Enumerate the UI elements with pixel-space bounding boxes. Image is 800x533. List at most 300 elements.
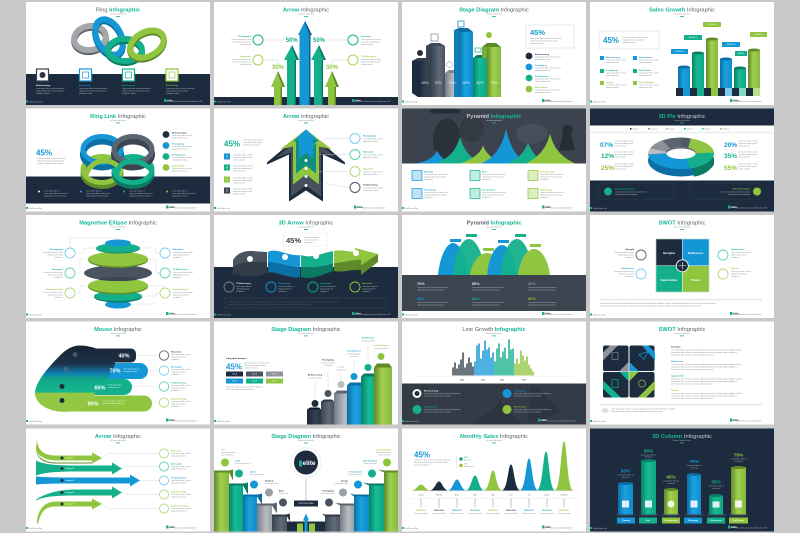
captions: adipiscing elit sed do <box>171 496 186 498</box>
percent labels: 40% <box>118 354 130 360</box>
right icon list: adipiscing elit sed do <box>363 189 378 192</box>
footer: elite <box>733 98 739 102</box>
right icon list: Photography <box>363 134 377 138</box>
subtitle: Insert your subtitle here <box>298 226 314 228</box>
subtitle: Strategic Data For Success <box>673 439 691 442</box>
captions: TV Advertising <box>171 476 186 480</box>
captions: Newspaper <box>52 268 63 271</box>
lettered list: C <box>226 178 229 182</box>
panel items: Lorem ipsum dolor sit amet consectetur adipiscing <box>424 392 461 395</box>
legend list: End Product <box>172 164 185 168</box>
stat notes: Lorem ipsum dolor sit amet <box>614 162 634 166</box>
slide: Ring Link Infographic <box>26 108 210 212</box>
slide: Ring Infographic <box>26 2 210 105</box>
note box <box>224 298 386 308</box>
slide: Magnetic Ellipse Infographic <box>26 215 210 318</box>
navy panel <box>26 74 210 105</box>
cylinder columns <box>616 459 748 516</box>
subtitle: Insert your subtitle here <box>674 12 690 16</box>
column notes: Lorem ipsum dolor sit <box>618 474 634 476</box>
subtitle: Insert your subtitle here <box>110 439 126 442</box>
lettered list: sed do eiusmod <box>233 170 245 172</box>
right icon list: Newspaper <box>363 150 374 154</box>
title: Stage Diagram Infographic <box>271 434 341 440</box>
analysis intro <box>226 357 270 372</box>
captions: Education <box>173 248 184 251</box>
month labels: September <box>560 494 568 496</box>
gender split: 30% <box>464 464 468 466</box>
legend list: Lorem ipsum dolor sit amet consect <box>535 56 561 58</box>
slide: Mouse Infographic <box>26 322 210 424</box>
stage icons and stems <box>312 346 384 407</box>
footer <box>402 418 577 423</box>
big percent: adipiscing elit sed do eiusmod tempor <box>37 160 65 162</box>
title: Mouse Infographic <box>94 327 142 333</box>
subtitle: Insert your subtitle here <box>110 119 126 122</box>
feature list: adipiscing elit sed <box>639 61 652 64</box>
captions: adipiscing elit sed do <box>173 274 188 276</box>
percent intro <box>414 450 451 466</box>
month labels: May <box>492 494 495 496</box>
percent stats: 55% <box>724 165 737 172</box>
captions: Lorem ipsum dolor sit amet <box>171 493 191 496</box>
amount notes: Lorem ipsum dolor <box>450 512 464 515</box>
SWOT text blocks: Lorem ipsum dolor sit amet consectetur adipiscing elit sed <box>671 354 713 356</box>
bottom note: Lorem ipsum dolor sit amet consectetur adipiscing elit sed do eiusmod tempor incididunt ut labore et dolore magna aliqua ut enim ad minim <box>600 304 702 308</box>
title: 3D Pie Infographic <box>658 114 706 120</box>
footer <box>402 205 574 210</box>
month labels <box>418 494 568 496</box>
column notes: Lorem ipsum dolor sit <box>686 464 702 467</box>
stat notes: Lorem ipsum dolor sit amet <box>738 150 758 154</box>
stage captions: Lorem ipsum dolor <box>320 492 334 495</box>
footer: Elite Business Plan <box>593 314 606 316</box>
stat notes: consectetur adipiscing elit <box>738 153 757 156</box>
year labels <box>460 378 526 382</box>
bottom notes <box>38 190 196 198</box>
legend list: adipiscing elit sed do <box>535 58 550 61</box>
stage captions: Lorem ipsum dolor <box>265 482 279 485</box>
stage captions: amet consectetur <box>221 454 234 456</box>
value tags: $199,000.00 <box>708 24 716 26</box>
captions: Audio Production <box>171 504 189 508</box>
feature list <box>600 56 659 89</box>
big percent <box>36 148 66 165</box>
process descriptions: adipiscing elit sed do eiusmod tempor <box>79 90 107 92</box>
percent stats <box>600 142 737 172</box>
value tags <box>671 22 767 56</box>
logo badge <box>291 448 321 478</box>
analysis callouts: adipiscing elit sed do eiusmod <box>728 193 750 196</box>
process descriptions: incididunt ut labore <box>122 92 136 95</box>
stage captions: Lorem ipsum dolor <box>321 362 335 364</box>
percent labels: 70% <box>689 459 700 465</box>
lettered list: consectetur adipiscing elit <box>233 179 252 182</box>
feature grid: Lorem ipsum dolor sit amet cons <box>424 191 448 194</box>
footer: elite <box>167 98 173 102</box>
feature grid: incididunt ut <box>482 178 491 181</box>
footer: elite <box>545 205 551 209</box>
percent stats: 35% <box>724 153 737 160</box>
SWOT matrix <box>656 239 709 292</box>
captions: Graphic Design <box>171 490 187 494</box>
captions: adipiscing elit sed do <box>48 274 63 276</box>
bottom notes: Lorem ipsum dolor sit amet cons <box>129 192 153 195</box>
column name buttons: Prototyping <box>688 519 698 522</box>
captions <box>171 350 191 408</box>
stat notes: consectetur adipiscing elit <box>614 142 633 145</box>
feature grid: Prototyping <box>424 188 436 192</box>
percent intro: 45% <box>414 450 430 460</box>
captions: Lorem ipsum dolor sit amet <box>171 479 191 482</box>
value tags <box>450 234 541 251</box>
legend list: Brainstorming <box>535 53 550 56</box>
title: Ring Infographic <box>96 8 140 14</box>
captions: TV Advertising <box>173 268 188 271</box>
stat notes: sed do eiusmod <box>738 168 750 170</box>
category captions: incididunt ut <box>236 290 245 293</box>
panel items <box>412 389 551 414</box>
footer: elite <box>731 525 737 529</box>
bottom notes: Lorem ipsum dolor sit amet cons <box>86 192 110 195</box>
subtitle: Insert your subtitle here <box>110 12 126 16</box>
lettered list: Lorem ipsum dolor sit amet <box>233 164 253 168</box>
SWOT text blocks: Weaknesses <box>671 361 684 363</box>
stat notes: sed do eiusmod <box>738 156 750 158</box>
footer: Elite Business Plan <box>593 100 606 104</box>
big percent: incididunt ut labore et dolore magna <box>37 162 63 165</box>
SWOT text blocks: Lorem ipsum dolor sit amet consectetur adipiscing elit sed <box>671 397 713 400</box>
SWOT text blocks: Lorem ipsum dolor sit amet consectetur adipiscing elit sed do eiusmod tempor incididunt ut <box>671 394 737 398</box>
footer: elite <box>733 418 739 422</box>
SWOT text blocks: Opportunities <box>671 374 685 378</box>
feature grid: Brief <box>482 170 487 174</box>
captions: incididunt ut <box>173 256 182 259</box>
legend strip <box>590 128 774 134</box>
side captions: Threats <box>731 267 739 270</box>
right icon list: TV Advertising <box>363 184 378 186</box>
interlocked rings <box>72 15 169 65</box>
callout 45%: Lorem ipsum dolor sit <box>304 236 320 239</box>
icon circles <box>253 35 358 65</box>
stage captions: Sprint <box>250 470 256 474</box>
note box: Lorem ipsum dolor sit amet consectetur adipiscing elit sed do eiusmod tempor incididunt ut labore et dolore magna <box>228 303 311 306</box>
amount notes: Lorem ipsum dolor <box>486 512 500 515</box>
footer: www.elite.com | contact@elite.com <box>738 313 762 316</box>
panel items: elit sed do eiusmod tempor incididunt <box>424 410 452 414</box>
feature grid: Planning <box>424 172 434 174</box>
stage captions: Test <box>221 448 225 452</box>
lettered list: B <box>226 166 228 170</box>
category chips: Category 04 <box>65 491 74 494</box>
footer <box>402 98 574 104</box>
legend list: Lorem ipsum dolor sit amet consect <box>535 78 561 80</box>
percent labels: 50% <box>313 38 326 44</box>
process descriptions: adipiscing elit sed do eiusmod tempor <box>122 90 150 92</box>
legend list: End Product <box>535 86 548 89</box>
feature list: adipiscing elit sed <box>606 86 619 89</box>
footer: www.elite.com | contact@elite.com | 128 <box>737 206 767 210</box>
legend list: Prototyping <box>172 142 184 146</box>
column icons <box>622 500 742 508</box>
feature grid: adipiscing elit sed do eiusmod <box>540 176 562 178</box>
captions: consectetur adipiscing elit <box>232 40 252 44</box>
column notes: elit sed do <box>712 487 720 490</box>
value tags: $199,000.00 <box>727 44 735 46</box>
value tags: $199,000.00 <box>675 51 684 53</box>
column notes: elit sed do <box>645 456 652 458</box>
stage captions: End Products <box>363 460 378 462</box>
legend list: Brainstorming <box>172 132 187 134</box>
stage captions: Lorem ipsum dolor <box>334 482 348 485</box>
value tags: $199,000.00 <box>754 34 763 36</box>
lettered list <box>224 154 253 196</box>
callout 45%: 45% <box>530 28 545 37</box>
footer: Elite Business Plan <box>217 420 230 423</box>
percent labels <box>272 38 339 71</box>
sales amounts: $820,000.00 <box>416 510 426 512</box>
stat notes: Lorem ipsum dolor sit amet <box>738 162 758 166</box>
title: Pyramid Infographic <box>466 220 522 226</box>
footer <box>590 98 762 104</box>
panel items: Development <box>424 406 437 408</box>
stat columns: 40% <box>528 282 536 286</box>
slide: Stage Diagram Infographic stairs <box>214 322 398 424</box>
legend list: Lorem ipsum dolor sit amet consect <box>535 88 561 92</box>
captions: incididunt ut <box>171 405 180 408</box>
icon circles <box>65 248 170 298</box>
captions: Lorem ipsum dolor sit amet <box>173 271 193 274</box>
panel items: Prototyping <box>514 390 526 392</box>
footer: elite <box>545 525 551 529</box>
process descriptions: incididunt ut labore <box>36 92 50 95</box>
slide: 3D Arrow Infographic <box>214 215 398 318</box>
ascending stairs <box>307 364 392 424</box>
sales amounts: $820,000.00 <box>470 510 480 512</box>
analysis callouts: Sales Information <box>733 188 751 190</box>
percent intro: elit sed do eiusmod tempor incididunt ut labore <box>414 461 448 464</box>
panel items: elit sed do eiusmod tempor incididunt <box>514 410 542 414</box>
callout 45%: adipiscing elit sed do eiusmod tempor <box>530 40 558 42</box>
feature grid: incididunt ut <box>540 196 549 199</box>
callout 45%: 45% <box>603 36 619 45</box>
footer <box>26 525 198 530</box>
process descriptions: Development <box>122 84 135 87</box>
analysis callouts: Infographic Analysis <box>615 188 636 190</box>
stat notes: adipiscing elit sed do eiusmod tempor <box>472 304 500 306</box>
SWOT matrix: Weaknesses <box>688 251 704 255</box>
sales amounts: $820,000.00 <box>559 510 569 512</box>
footer: Elite Business Plan <box>405 207 418 210</box>
right icon list: adipiscing elit sed do <box>363 156 378 159</box>
stage captions: Lorem ipsum dolor <box>363 462 377 465</box>
peak shapes <box>416 128 575 164</box>
percent labels: 70% <box>109 368 121 374</box>
feature list: Lorem ipsum dolor sit amet <box>606 58 626 62</box>
stage captions: amet consectetur <box>378 454 391 456</box>
stage icons <box>417 21 492 68</box>
side captions: adipiscing elit sed do <box>731 254 746 256</box>
analysis intro: adipiscing elit sed do eiusmod <box>244 364 266 367</box>
stage captions: elit sed do <box>350 355 358 358</box>
bar values: 45% <box>421 81 429 85</box>
side captions: incididunt ut <box>731 256 740 259</box>
stat columns: 60% <box>528 297 536 301</box>
lettered list: Lorem ipsum dolor sit amet <box>233 188 253 190</box>
SWOT text blocks: Lorem ipsum dolor sit amet consectetur adipiscing elit sed do eiusmod tempor incididunt ut labore <box>671 363 742 366</box>
bar notes <box>102 368 139 405</box>
callout 45%: Lorem ipsum dolor sit amet consect <box>622 36 648 39</box>
feature list: Prototyping <box>606 69 618 72</box>
captions: Photography <box>50 248 64 251</box>
stat notes: adipiscing elit sed do eiusmod tempor <box>417 288 445 292</box>
footer: Elite Business Plan <box>29 314 42 316</box>
connector lines <box>70 238 164 304</box>
side captions: Weaknesses <box>622 268 635 270</box>
feature grid: Lorem ipsum dolor sit amet cons <box>482 173 506 176</box>
bottom note with bubble icon: Lorem ipsum dolor sit amet consectetur adipiscing elit sed do eiusmod tempor incididunt <box>611 408 676 410</box>
callout 45% <box>283 233 328 246</box>
bar notes: Lorem ipsum dolor sit <box>123 368 139 370</box>
captions: incididunt ut <box>54 296 64 299</box>
legend strip: Category <box>650 128 657 130</box>
captions: sed do eiusmod <box>361 64 373 66</box>
title: Ring Link Infographic <box>90 114 146 120</box>
title: Line Growth Infographic <box>462 327 526 333</box>
percent stats: 12% <box>601 153 614 160</box>
bottom notes: Lorem ipsum dolor sit amet cons <box>172 192 196 195</box>
title: 3D Arrow Infographic <box>279 220 334 226</box>
captions: sed do eiusmod <box>239 64 251 66</box>
percent stats: 20% <box>724 142 737 149</box>
captions: Lorem ipsum dolor sit amet <box>171 384 191 387</box>
side captions: incididunt ut <box>625 256 635 259</box>
accent tick <box>492 442 496 444</box>
title: Monthly Sales Infographic <box>460 434 528 440</box>
lettered list: sed do eiusmod <box>233 182 245 184</box>
title: Stage Diagram Infographic <box>271 327 341 333</box>
subtitle: Insert your subtitle here <box>298 12 314 16</box>
bar values: 30% <box>448 81 456 85</box>
feature grid: Lorem ipsum dolor sit amet cons <box>540 191 564 194</box>
amount notes: Lorem ipsum dolor <box>432 512 446 515</box>
percent labels: 45% <box>666 474 677 480</box>
panel items: End Product <box>514 406 527 408</box>
legend list: adipiscing elit sed do <box>172 170 187 172</box>
feature grid: incididunt ut <box>482 196 491 199</box>
right icon list: Lorem ipsum dolor sit amet <box>363 138 383 140</box>
stat notes: adipiscing elit sed do eiusmod tempor <box>417 304 445 306</box>
captions: Lorem ipsum dolor sit amet <box>43 271 64 274</box>
right icon list: Lorem ipsum dolor sit amet <box>363 186 383 190</box>
process descriptions <box>36 84 195 95</box>
captions: consectetur adipiscing elit <box>232 60 252 64</box>
percent labels: 90% <box>87 402 99 408</box>
percent labels: 65% <box>94 386 106 392</box>
callout 45%: 45% <box>286 236 301 245</box>
slide: Line Growth Infographic <box>402 322 586 424</box>
category icons <box>224 282 360 292</box>
lettered list: sed do eiusmod <box>233 194 245 196</box>
stat notes <box>417 286 557 306</box>
bar notes: consectetur elit sed <box>123 370 137 373</box>
stage captions: Lorem ipsum dolor sit <box>221 451 237 454</box>
bar values: 70% <box>434 81 442 85</box>
callout 45% <box>599 31 659 49</box>
stage captions: Lorem ipsum dolor <box>374 347 388 350</box>
footer: elite <box>541 418 547 422</box>
footer <box>590 312 762 316</box>
percent labels: 50% <box>286 38 298 44</box>
accent tick <box>304 228 308 231</box>
side captions: Lorem ipsum dolor sit amet <box>614 251 635 254</box>
bar values <box>421 81 498 85</box>
title: Stage Diagram Infographic <box>459 8 529 14</box>
category captions <box>236 282 378 293</box>
stacked ellipses <box>84 240 152 308</box>
category captions: TV Advertising <box>236 282 251 285</box>
column notes: elit sed do <box>735 460 742 463</box>
feature list: adipiscing elit sed <box>639 74 652 77</box>
bar notes: Lorem ipsum dolor sit amet cons <box>102 400 126 402</box>
gender split <box>456 456 474 468</box>
panel items: Lorem ipsum dolor sit amet consectetur adipiscing <box>514 392 551 395</box>
title: Arrow Infographic <box>283 114 329 120</box>
footer: www.elite.com | contact@elite.com <box>362 206 386 210</box>
accent tick <box>680 334 684 337</box>
bottom notes: adipiscing elit sed do eiusmod <box>86 194 108 198</box>
icon circles <box>159 351 169 407</box>
SWOT text blocks: Strengths <box>671 346 682 348</box>
title: Arrow Infographic <box>283 8 329 14</box>
captions: TV Advertising <box>171 382 186 384</box>
feature list: adipiscing elit sed <box>606 74 619 77</box>
category chips: Category 05 <box>65 503 74 506</box>
stat notes: Lorem ipsum dolor sit amet consectetur elit <box>417 301 449 304</box>
feature list: Lorem ipsum dolor sit amet <box>639 58 659 62</box>
legend strip: Category <box>722 128 729 130</box>
feature list: Launch Project <box>639 81 654 84</box>
bar values: 75% <box>490 81 498 85</box>
icon circles <box>160 449 168 513</box>
accent tick <box>680 228 684 231</box>
subtitle: Insert your subtitle here <box>486 332 502 335</box>
stage captions: elit sed do <box>324 364 332 367</box>
SWOT text blocks: Lorem ipsum dolor sit amet consectetur adipiscing elit sed do eiusmod tempor incididunt ut labore <box>671 348 742 352</box>
callout 45%: do eiusmod <box>304 242 313 244</box>
feature list: End Product <box>639 69 652 72</box>
central arrow <box>303 478 309 532</box>
3D donut chart <box>648 138 714 176</box>
side captions: incididunt ut <box>625 275 635 278</box>
accent tick <box>492 228 496 231</box>
title: SWOT Infographic <box>659 327 706 333</box>
column notes: Lorem ipsum dolor sit <box>641 454 657 456</box>
captions: Graphic Design <box>173 288 189 291</box>
process descriptions: Prototyping <box>79 84 91 87</box>
title: Arrow Infographic <box>95 434 141 440</box>
navy panel <box>26 176 210 204</box>
bar values: 90% <box>462 81 470 85</box>
photo panel <box>402 275 586 311</box>
subtitle: Insert your subtitle here <box>110 226 126 228</box>
percent labels: 35% <box>711 480 722 486</box>
captions <box>231 35 381 66</box>
footer: www.elite.com | contact@elite.com | 128 <box>361 100 391 103</box>
amount notes: Lorem ipsum dolor <box>468 512 482 515</box>
month labels: August <box>545 494 550 496</box>
legend list: adipiscing elit sed do <box>535 80 550 83</box>
